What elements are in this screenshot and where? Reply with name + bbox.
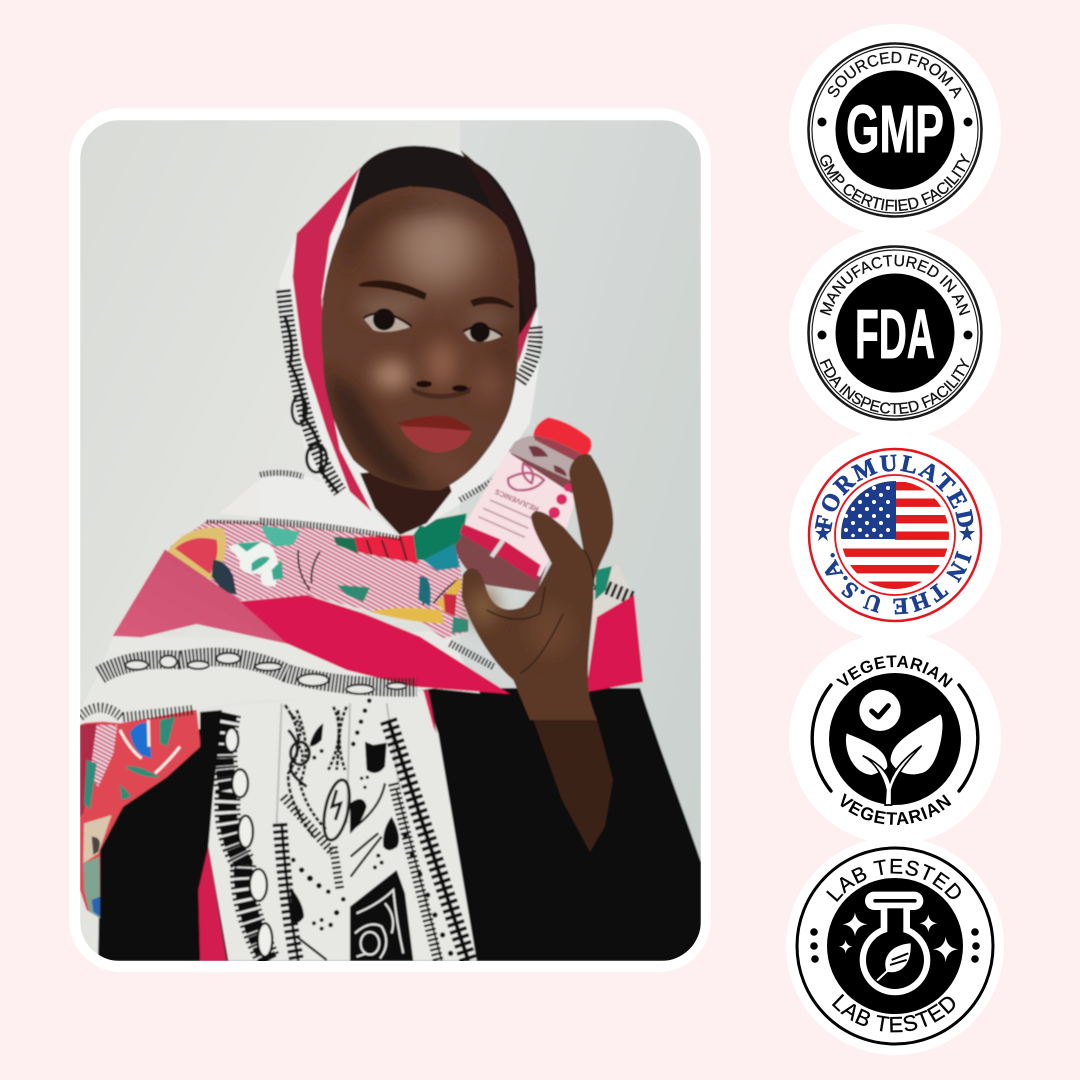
- drape white highlights: [120, 720, 180, 773]
- icon: stem: [863, 746, 922, 805]
- forehead highlight: [393, 203, 480, 290]
- yellow motif: [369, 608, 444, 623]
- dark paisley accents: [310, 723, 323, 747]
- dense floral corner: [350, 870, 413, 961]
- vegetarian seal: [829, 673, 961, 805]
- floral patch base: [170, 521, 468, 638]
- panel base: [208, 690, 477, 961]
- flask bulb: [860, 925, 930, 995]
- left stripe band: [280, 797, 340, 961]
- label brand: REJUVENICS: [493, 487, 540, 514]
- drape pale lower section: [83, 815, 112, 863]
- black blobs: [290, 742, 399, 923]
- paisley chain: [224, 713, 272, 961]
- crimson band: [240, 595, 510, 694]
- vegetarian top arc text: VEGETARIAN: [836, 655, 953, 688]
- face shading group: [325, 193, 517, 490]
- icon: left leaf: [846, 733, 887, 775]
- white scarf band: [80, 630, 480, 723]
- nose highlight: [427, 342, 457, 385]
- filigree: [285, 705, 354, 842]
- photo frame: [69, 108, 711, 972]
- red edge right: [423, 690, 437, 733]
- lab white backing: [786, 837, 1004, 1055]
- badge: Lab tested: [786, 840, 1004, 1055]
- vegetarian bottom arc text: VEGETARIAN: [840, 793, 952, 826]
- right cheek warm: [473, 363, 507, 403]
- right eye: [463, 322, 503, 342]
- red scarf lining: [293, 167, 372, 512]
- bottle body: [455, 440, 580, 593]
- face: [321, 187, 519, 490]
- drape teal leaves: [84, 717, 175, 810]
- GMP white backing: [789, 24, 1001, 236]
- hair: [322, 146, 537, 360]
- GMP seal: [836, 70, 954, 190]
- icon: check mark: [872, 706, 888, 717]
- flask cap: [865, 892, 923, 910]
- lab top arc text: LAB TESTED: [826, 858, 961, 902]
- drape blue petal: [130, 723, 152, 758]
- GMP bottom arc text: GMP CERTIFIED FACILITY: [820, 152, 970, 211]
- dress left shoulder overlay: [100, 710, 222, 961]
- vegetarian side arcs: [812, 685, 978, 791]
- FDA white backing: [789, 227, 1001, 439]
- American flag: [841, 481, 949, 590]
- red strip: [198, 847, 227, 961]
- gummy at shoulder: [528, 446, 567, 477]
- dark motif: [212, 560, 237, 595]
- chin warm: [417, 453, 470, 480]
- hanging scarf panel: [198, 690, 477, 961]
- leaf border: [100, 653, 417, 694]
- icon: plant with checkmark: [846, 690, 942, 805]
- right floral motif: [418, 576, 468, 633]
- bottle cap: [533, 417, 592, 457]
- icon: right leaf: [891, 714, 942, 774]
- drape dark red: [80, 723, 97, 817]
- bottle shoulder glass: [508, 436, 583, 483]
- badge: GMP: [789, 24, 1001, 232]
- GMP rings: [808, 44, 982, 216]
- drape striped pink: [90, 725, 117, 787]
- left eye: [363, 308, 412, 332]
- shoulder bands: [80, 480, 510, 723]
- photo: woman in patterned headscarf holding a supplement bottle: [80, 120, 701, 961]
- fold shadows: [277, 703, 400, 823]
- red and green neck section: [333, 513, 467, 571]
- black dress: [98, 688, 701, 961]
- rose band: [113, 549, 288, 644]
- GMP side dots: [818, 118, 972, 126]
- lab outer ring: [797, 848, 993, 1044]
- bottle label: [461, 452, 577, 577]
- fold pattern edges: [207, 481, 493, 667]
- USA bottom arc text: IN THE U.S.A.: [824, 550, 972, 614]
- neck: [360, 470, 452, 535]
- badge: FDA: [789, 232, 1001, 434]
- watermelon motif: [167, 528, 226, 580]
- GMP centre label: GMP: [846, 92, 944, 167]
- lab seal: [827, 878, 963, 1014]
- fold lines in floral: [298, 550, 460, 605]
- curved double lines: [351, 783, 385, 877]
- label badges: [549, 484, 572, 518]
- bottle and hand: [455, 417, 613, 720]
- USA white backing: [789, 429, 1001, 641]
- forearm: [522, 688, 613, 852]
- head scarf white base: [279, 147, 539, 527]
- head group: [260, 146, 539, 538]
- FDA centre label: FDA: [855, 295, 935, 373]
- sparkles: [839, 912, 958, 962]
- USA top arc text: FORMULATED: [814, 454, 974, 532]
- FDA seal: [836, 274, 954, 392]
- icon: check circle: [859, 690, 901, 731]
- FDA side dots: [818, 330, 972, 340]
- diagonal toothed bands: [388, 720, 468, 961]
- flask leaf: [885, 943, 911, 972]
- label logo: [508, 463, 544, 490]
- glass glare: [492, 540, 503, 557]
- forehead edge shadow: [340, 193, 507, 277]
- badge: Formulated in the USA: [789, 434, 1001, 636]
- cheek highlight: [373, 360, 410, 390]
- scarf black pattern left: [260, 290, 500, 538]
- eyebrows: [358, 280, 515, 308]
- lower left fringe: [80, 708, 193, 717]
- teal flower: [228, 525, 300, 587]
- label fine print: [478, 500, 532, 537]
- left colourful drape: [80, 710, 201, 918]
- right shoulder patterned scarf and red edge: [586, 565, 643, 692]
- upper white fold: [222, 482, 258, 516]
- GMP top arc text: SOURCED FROM A: [828, 52, 962, 99]
- right side shadow: [490, 257, 517, 417]
- vegetarian white backing: [789, 632, 1001, 844]
- drape base: [80, 710, 201, 918]
- scattered dots: [291, 698, 384, 931]
- USA rings: [809, 449, 981, 621]
- nostrils: [410, 381, 472, 399]
- USA stars: [815, 525, 975, 541]
- wall background: [80, 120, 701, 961]
- hand highlights: [468, 587, 573, 657]
- hand crease lines: [487, 550, 594, 673]
- badge: Vegetarian: [789, 636, 1001, 840]
- lab side dots: [810, 928, 980, 963]
- scarf black pattern right: [518, 327, 535, 383]
- eye lids: [358, 295, 510, 328]
- scarf bottom fold white: [260, 473, 400, 538]
- icon: flask with leaf: [839, 892, 958, 995]
- FDA rings: [808, 246, 982, 420]
- bottle label red bar: [460, 524, 541, 580]
- lab bottom arc text: LAB TESTED: [832, 994, 956, 1032]
- lips: [395, 416, 473, 453]
- lower left shadow: [325, 370, 440, 490]
- dots between bands: [402, 832, 453, 956]
- FDA top arc text: MANUFACTURED IN AN: [820, 254, 970, 316]
- hand: [462, 454, 613, 720]
- FDA bottom arc text: FDA INSPECTED FACILITY: [820, 358, 970, 414]
